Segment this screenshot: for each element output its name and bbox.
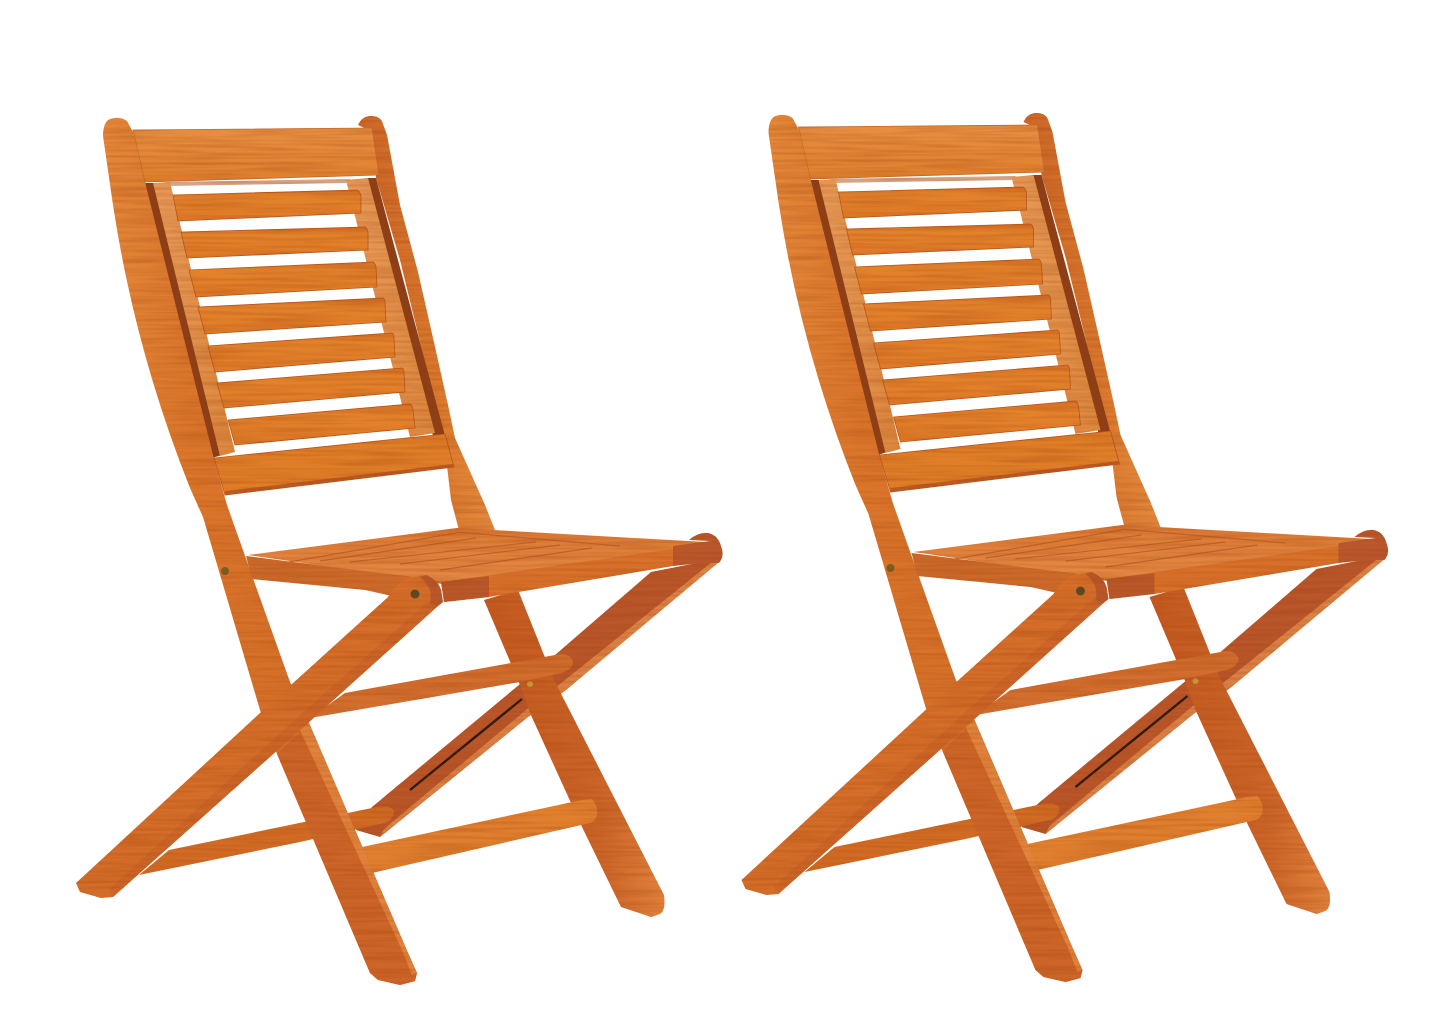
front strut edge — [108, 600, 438, 897]
pivot screw — [410, 590, 420, 598]
seat slats — [283, 532, 620, 570]
chair: left — [76, 116, 723, 985]
rear right strut — [356, 558, 722, 837]
lower back rail — [214, 434, 454, 495]
frame screw — [221, 567, 229, 575]
right knob — [689, 533, 723, 563]
seat top — [248, 528, 710, 584]
top rail — [133, 128, 379, 182]
front knob — [420, 575, 443, 606]
strut slot — [410, 699, 522, 790]
front strut — [76, 575, 443, 898]
right inner frame — [346, 178, 435, 437]
left long rail — [103, 118, 417, 985]
lower back rail underside — [225, 464, 454, 495]
seat side rail — [246, 556, 442, 596]
rear low rod — [139, 806, 394, 875]
left rail lower highlight — [300, 723, 417, 975]
left inner frame — [153, 182, 235, 456]
seat front rail — [441, 549, 673, 602]
left rail lower shading — [277, 723, 417, 985]
backrest slats — [173, 190, 415, 445]
front low rail — [362, 799, 597, 873]
right back rail — [358, 116, 495, 530]
seat right end cap — [673, 541, 710, 566]
strut edge highlight — [380, 562, 718, 837]
right rear leg — [484, 590, 664, 917]
top slat shadow strip — [165, 179, 350, 186]
seat front rail dark end — [441, 576, 489, 602]
rear rod pivot screw — [527, 681, 533, 687]
chair: right — [742, 113, 1388, 982]
shadow gaps behind backrest — [145, 178, 445, 458]
upper cross rod — [310, 654, 573, 718]
